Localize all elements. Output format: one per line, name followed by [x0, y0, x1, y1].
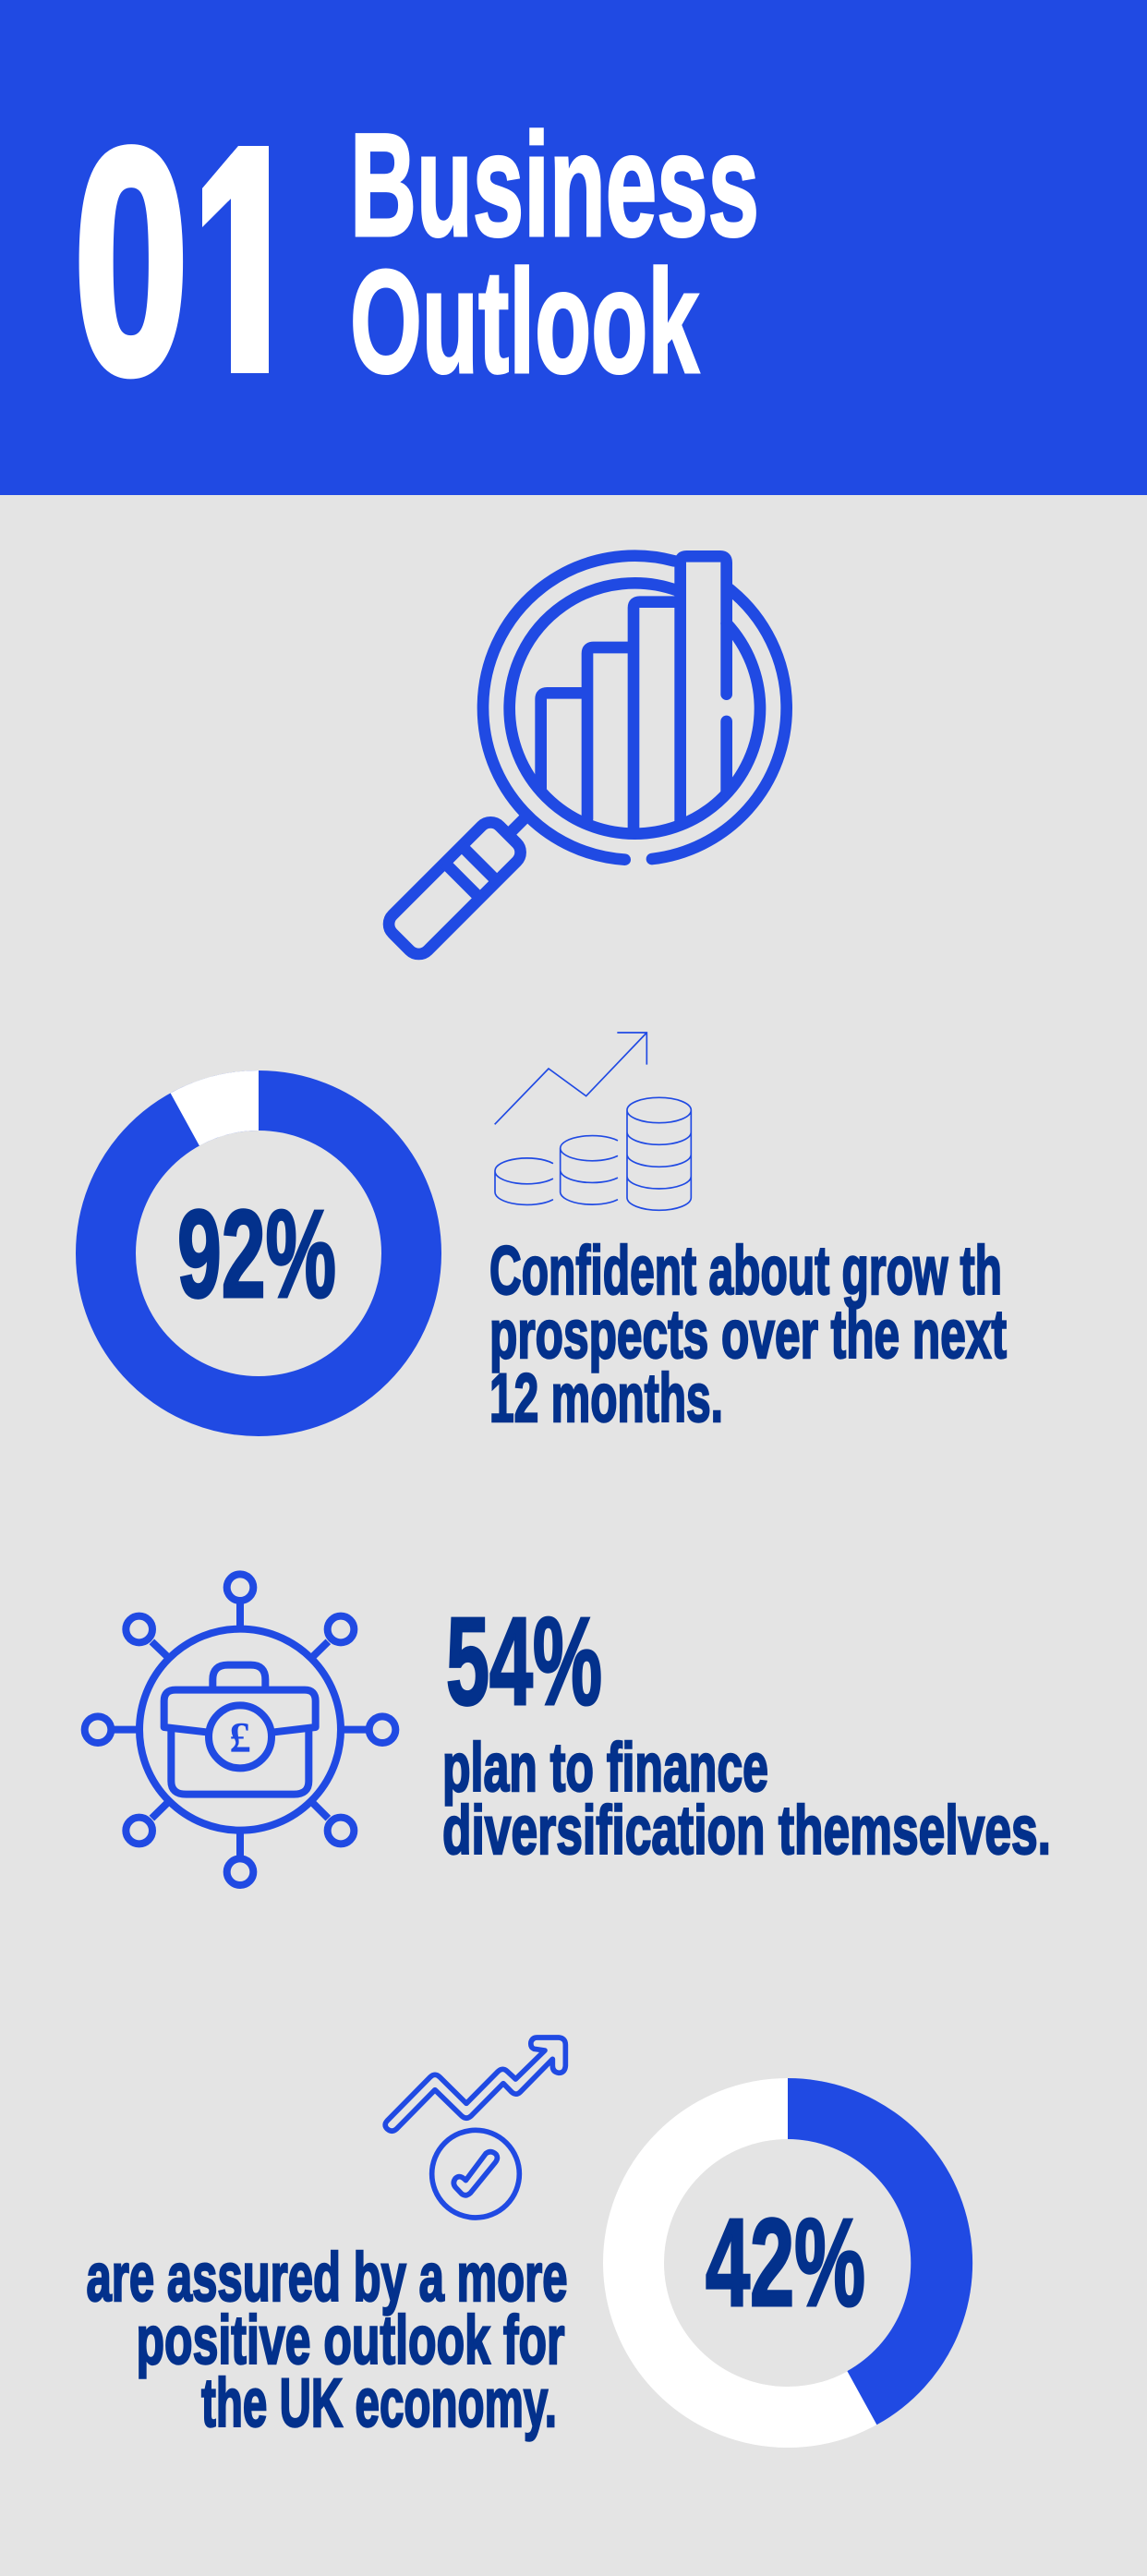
icon: briefcase network: £: [229, 1714, 251, 1762]
icon: rising trend arrow with check: [385, 2038, 565, 2218]
text: assured by a more positive outlook: positive outlook for: [137, 2302, 565, 2378]
text: 54% plan to finance diversification themselves: plan to finance: [442, 1729, 768, 1806]
text: assured by a more positive outlook: [87, 2239, 567, 2441]
donut chart: 92%: [105, 1070, 412, 1406]
value: 42%: 42%: [706, 2193, 865, 2332]
icon: coin stacks with rising arrow: [495, 1033, 691, 1210]
section number: 1: [189, 86, 282, 441]
text: 54% plan to finance diversification themselves: [442, 1591, 1051, 1869]
section number: 0: [74, 84, 188, 440]
value: 92%: 92%: [177, 1184, 336, 1324]
text: assured by a more positive outlook: are assured by a more: [87, 2239, 567, 2316]
text: assured by a more positive outlook: the UK economy.: [201, 2364, 557, 2441]
section number: [79, 144, 269, 379]
title: Outlook: [350, 239, 699, 404]
text: confident about growth: 12 months.: [489, 1360, 723, 1436]
icon: briefcase network: [85, 1574, 395, 1885]
donut chart: 42%: [634, 2078, 972, 2425]
title: Business: [350, 103, 759, 267]
value: 54%: 54%: [446, 1591, 602, 1731]
icon: magnifying glass over bar chart: [383, 556, 787, 960]
header banner: [0, 0, 1147, 495]
title: [350, 103, 759, 404]
text: confident about growth: [489, 1232, 1007, 1436]
